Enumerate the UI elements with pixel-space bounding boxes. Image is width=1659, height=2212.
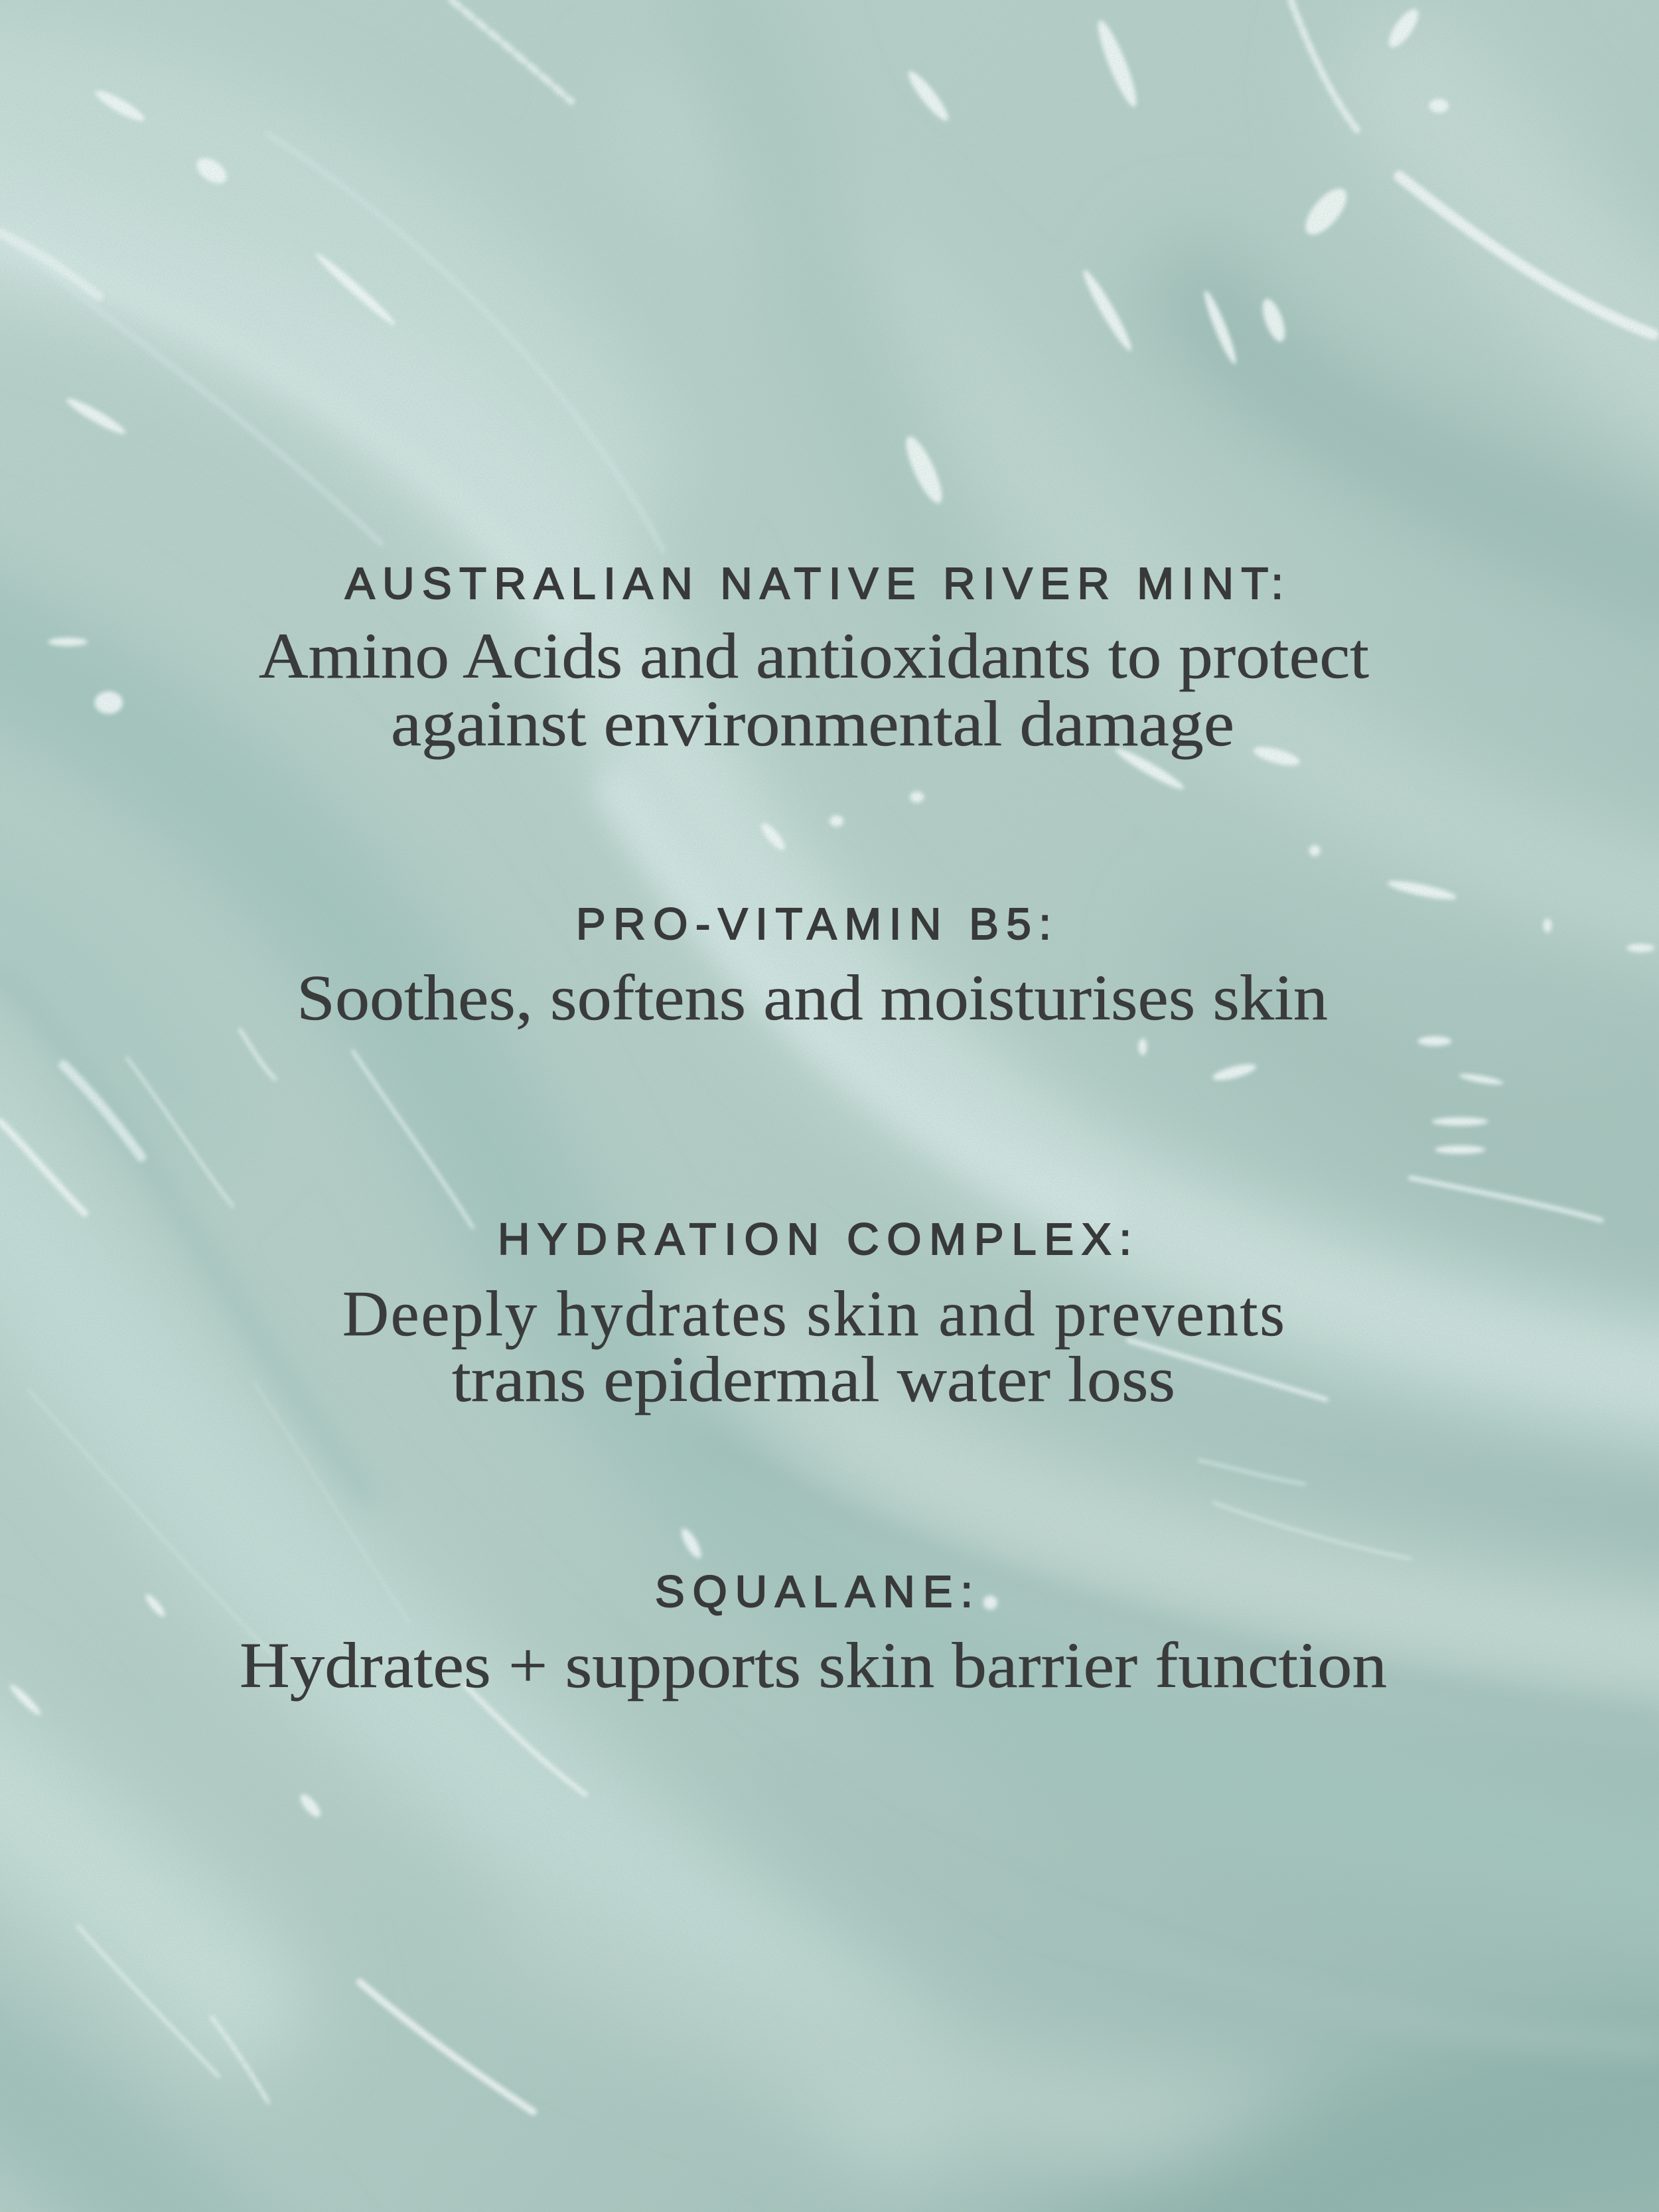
heading: river mint: AUSTRALIAN NATIVE RIVER MINT: <box>345 559 1283 609</box>
heading: hydration complex: HYDRATION COMPLEX: <box>498 1215 1131 1264</box>
description: pro-vitamin B5: Soothes, softens and moisturises skin <box>297 962 1328 1033</box>
ingredient: pro-vitamin B5 <box>297 899 1328 1033</box>
description: river mint <box>259 621 1369 759</box>
ingredient: squalane <box>240 1567 1387 1701</box>
ingredient: hydration complex <box>342 1215 1285 1415</box>
description: hydration complex <box>342 1278 1285 1415</box>
description: squalane: Hydrates + supports skin barrier function <box>240 1630 1387 1701</box>
description: hydration complex: trans epidermal water loss <box>452 1344 1175 1415</box>
description: river mint: Amino Acids and antioxidants to protect <box>259 621 1369 692</box>
description: river mint: against environmental damage <box>391 688 1234 759</box>
description: hydration complex: Deeply hydrates skin and prevents <box>342 1278 1285 1349</box>
ingredient: Australian native river mint <box>259 559 1369 759</box>
heading: squalane: SQUALANE: <box>655 1567 973 1617</box>
heading: pro-vitamin B5: PRO-VITAMIN B5: <box>576 899 1051 949</box>
